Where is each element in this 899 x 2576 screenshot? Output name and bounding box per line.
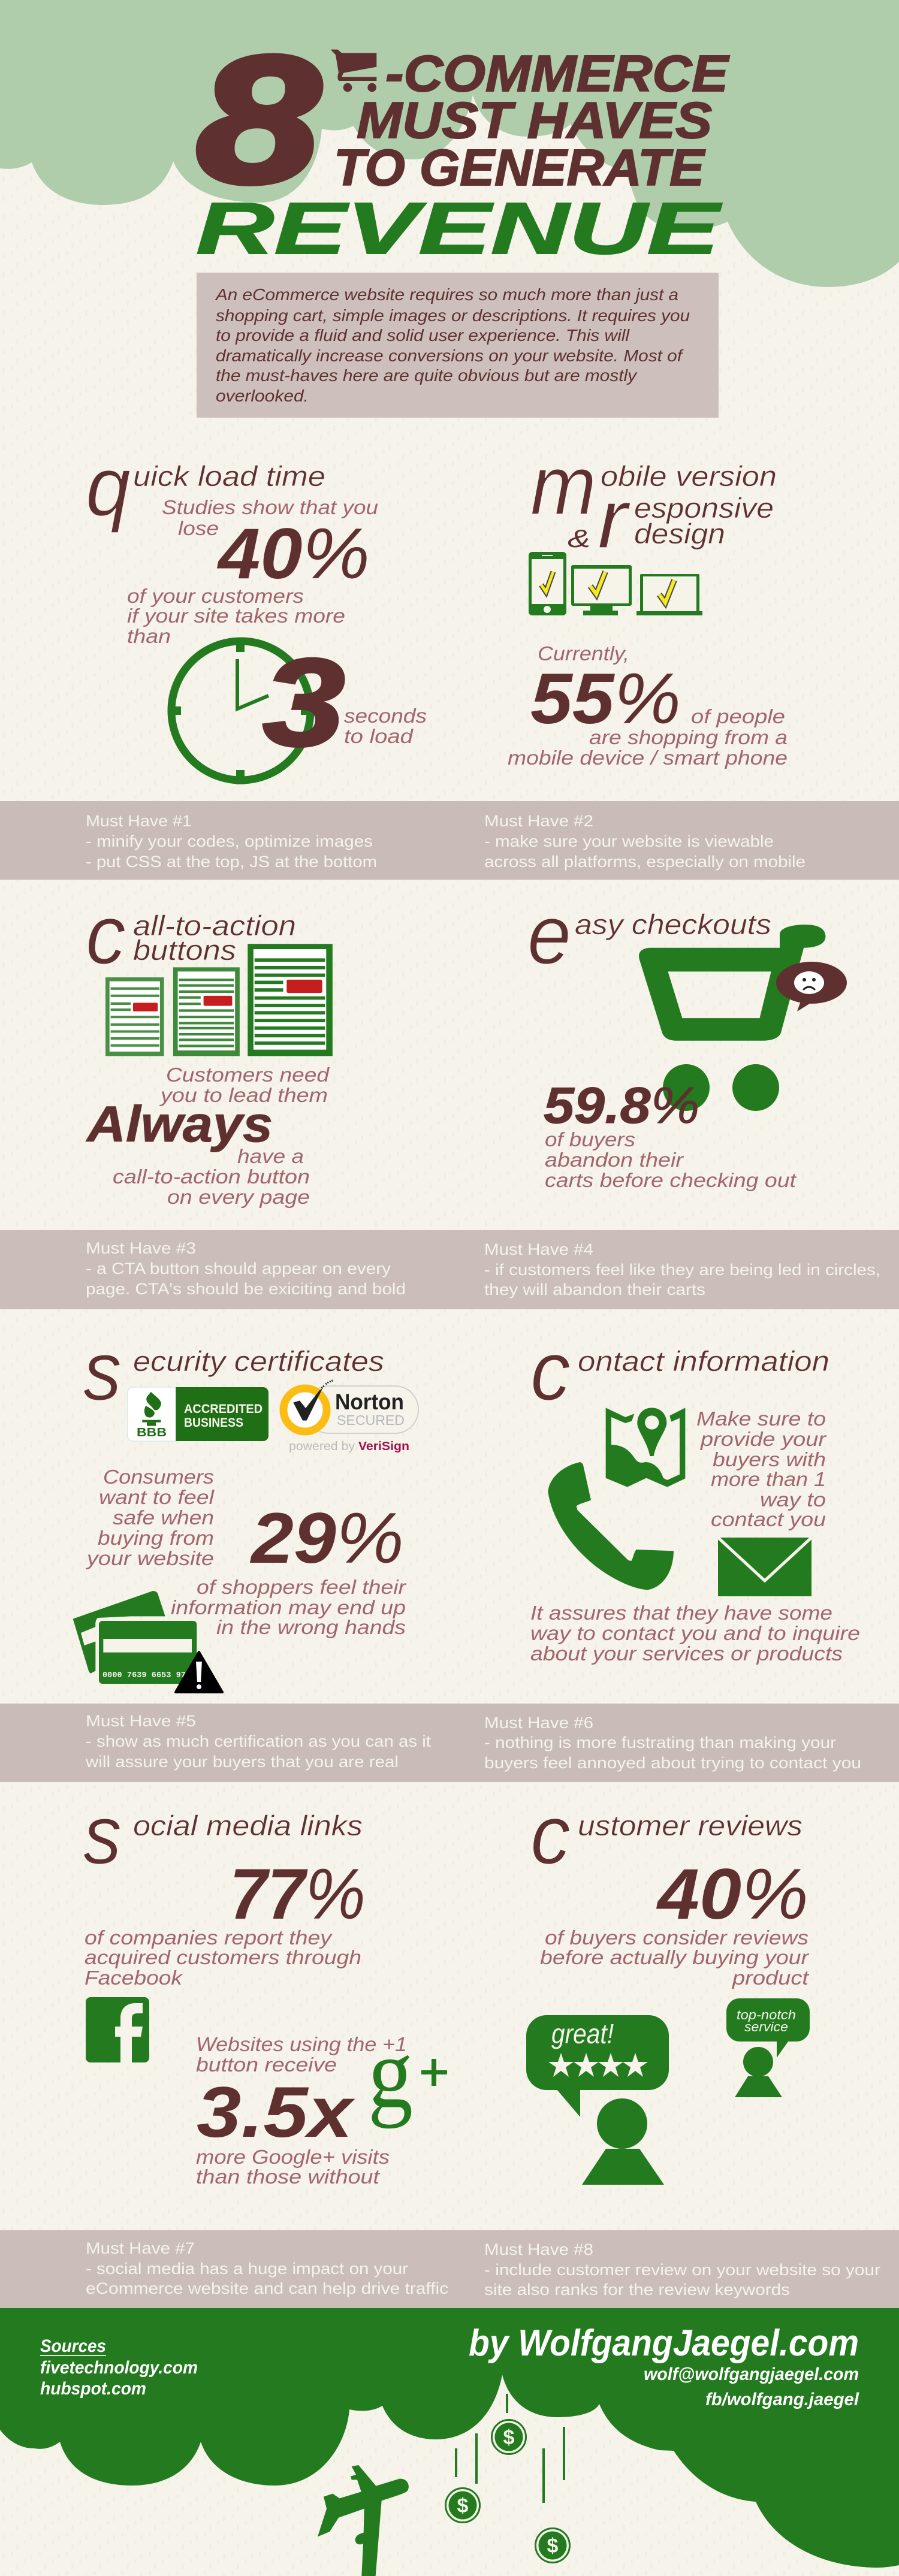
badge: Norton secured: SECURED [337, 1412, 405, 1428]
stat: 40%: 40% [217, 514, 370, 594]
text: consumers: buying from [98, 1527, 214, 1549]
footer author: by WolfgangJaegel.com [469, 2323, 859, 2364]
text: it assures: way to contact you and to inquire [530, 1622, 860, 1644]
text: make sure: provide your [700, 1428, 827, 1450]
text: studies show: lose [178, 517, 219, 539]
must have 8: Must Have #8 [484, 2240, 593, 2258]
heading: call-to-action buttons: c [86, 887, 126, 982]
heading: easy checkouts: asy checkouts [575, 908, 771, 940]
must have 4: Must Have #4 [484, 1240, 593, 1258]
heading: security certificates [83, 1324, 384, 1418]
heading: contact information: ontact information [578, 1345, 829, 1377]
title line 3: TO GENERATE [334, 140, 705, 197]
must have 4: they will abandon their carts [484, 1281, 705, 1298]
must have 1 [86, 812, 377, 871]
icon: great review bubble [526, 2015, 669, 2117]
intro text: dramatically increase conversions on your website. Most of [216, 346, 684, 365]
icon: google plus [368, 2018, 447, 2129]
text: make sure: more than 1 [711, 1468, 826, 1490]
text: consumers [86, 1466, 215, 1569]
title numeral 8: 8 [197, 19, 321, 220]
text: of shoppers: of shoppers feel their [197, 1576, 407, 1598]
badge: Norton secured: Norton [335, 1390, 404, 1414]
heading: social media links [83, 1787, 363, 1882]
text: make sure: contact you [711, 1508, 826, 1530]
stat: 29%: 29% [250, 1498, 404, 1578]
text: of buyers consider: product [732, 1967, 810, 1989]
must have 8 [484, 2240, 880, 2299]
text: consumers: want to feel [99, 1486, 215, 1508]
stat: 59.8%: 59.8% [544, 1077, 699, 1134]
text: of shoppers: information may end up [171, 1596, 406, 1618]
heading: customer reviews: c [530, 1787, 571, 1882]
heading: mobile version and responsive design: r [598, 472, 631, 566]
heading: mobile version and responsive design: design [634, 518, 725, 549]
intro text [215, 285, 690, 405]
icon: medium page [173, 967, 240, 1056]
icon: top-notch bubble: top-notch [737, 2007, 796, 2022]
must have 1: Must Have #1 [86, 812, 192, 830]
heading: contact information: c [530, 1324, 571, 1418]
text: it assures: about your services or products [530, 1642, 843, 1665]
icon: dollar coin 1: $ [503, 2426, 515, 2449]
badge: BBB accredited business: BUSINESS [184, 1416, 243, 1430]
heading: mobile version and responsive design: & [568, 524, 590, 552]
icon: shopping cart [331, 50, 376, 92]
icon: clock [168, 638, 314, 784]
must have 5: Must Have #5 [86, 1712, 196, 1730]
footer author: wolf@wolfgangjaegel.com [644, 2364, 859, 2384]
intro text: the must-haves here are quite obvious but are mostly [216, 366, 638, 385]
intro panel [197, 273, 719, 418]
footer sources: fivetechnology.com [40, 2358, 198, 2378]
footer author: fb/wolfgang.jaegel [705, 2390, 859, 2409]
text: have a button: on every page [167, 1186, 310, 1208]
text: of companies: Facebook [85, 1967, 183, 1989]
heading: call-to-action buttons [86, 887, 296, 982]
stat: 3.5x: 3.5x [197, 2072, 355, 2152]
heading: social media links: s [83, 1787, 122, 1882]
text: studies show [162, 496, 378, 539]
must have 3: page. CTA's should be exiciting and bold [86, 1280, 406, 1298]
icon: dollar coin 3 [536, 2529, 569, 2562]
icon: top-notch bubble [726, 1998, 810, 2058]
must have 5: will assure your buyers that you are real [85, 1753, 399, 1771]
must have 2: - make sure your website is viewable [484, 832, 774, 850]
text: seconds to load: to load [344, 725, 414, 747]
text: more google visits [196, 2146, 390, 2188]
text: of people shopping: are shopping from a [589, 726, 788, 748]
heading: mobile version and responsive design: obile version [601, 460, 777, 492]
icon: dollar coin 2 [446, 2488, 479, 2523]
must have 4: - if customers feel like they are being led in circles, [484, 1261, 880, 1279]
heading: easy checkouts: e [527, 887, 571, 982]
must have 3 [86, 1239, 406, 1298]
badge: BBB accredited business: ACCREDITED [184, 1402, 263, 1416]
must have 5: - show as much certification as you can as it [86, 1732, 432, 1750]
heading: quick load time [86, 439, 325, 533]
must have 6: - nothing is more fustrating than making your [484, 1734, 836, 1751]
heading: mobile version and responsive design [530, 438, 777, 566]
icon: dollar coin 1 [491, 2420, 526, 2454]
text: it assures [530, 1602, 860, 1665]
icon: credit cards with warning [73, 1591, 222, 1692]
text: more google visits: than those without [196, 2166, 381, 2188]
heading: security certificates: ecurity certificates [133, 1345, 384, 1377]
must have 6: buyers feel annoyed about trying to contact you [484, 1754, 861, 1772]
band: must have 1 and 2 [0, 801, 899, 880]
icon: envelope [718, 1538, 811, 1596]
text: studies show: Studies show that you [162, 496, 378, 518]
falling coin streaks [456, 2394, 564, 2503]
icon: large page [248, 944, 333, 1056]
icon: credit cards with warning: 0000 7639 6653 97 [102, 1671, 186, 1680]
top cloud [0, 0, 899, 287]
text: of buyers abandon [545, 1128, 797, 1191]
band: must have 3 and 4 [0, 1230, 899, 1309]
icon: phone device [529, 552, 566, 615]
band: must have 7 and 8 [0, 2230, 899, 2308]
heading: quick load time: q [86, 439, 131, 533]
icon: facebook [86, 1997, 149, 2062]
must have 1: - minify your codes, optimize images [86, 832, 373, 850]
text: of buyers consider: of buyers consider reviews [545, 1926, 809, 1949]
heading: customer reviews [530, 1787, 803, 1882]
panel: mobile version [508, 438, 788, 769]
icon: dollar coin 3: $ [547, 2535, 559, 2557]
must have 8: - include customer review on your website so your [484, 2261, 880, 2279]
text: of buyers abandon: abandon their [545, 1149, 684, 1171]
icon: person large [582, 2098, 664, 2185]
intro text: to provide a fluid and solid user experience. This will [216, 326, 630, 345]
heading: easy checkouts [527, 887, 771, 982]
text: make sure: way to [760, 1488, 826, 1511]
text: of shoppers: in the wrong hands [216, 1616, 406, 1638]
heading: contact information [530, 1324, 829, 1418]
text: of your customers [127, 585, 345, 647]
text: of companies: of companies report they [85, 1926, 333, 1949]
heading: social media links: ocial media links [133, 1810, 363, 1841]
heading: call-to-action buttons: buttons [133, 934, 236, 966]
panel: security certificates [73, 1324, 418, 1692]
text: consumers: your website [86, 1547, 214, 1569]
must have 3: - a CTA button should appear on every [86, 1260, 391, 1278]
heading: quick load time: uick load time [133, 460, 325, 492]
text: have a button: call-to-action button [113, 1165, 310, 1188]
footer sources: Sources [40, 2336, 106, 2356]
must have 4 [484, 1240, 880, 1298]
text: make sure: buyers with [713, 1448, 826, 1470]
text: have a button: have a [237, 1145, 304, 1167]
must have 7: eCommerce website and can help drive traffic [86, 2279, 448, 2297]
icon: telephone handset [548, 1462, 674, 1590]
text: of companies: acquired customers through [85, 1946, 361, 1968]
text: of buyers consider [540, 1926, 810, 1989]
text: customers need: you to lead them [159, 1084, 328, 1106]
text: websites using: button receive [196, 2053, 337, 2076]
must have 2: Must Have #2 [484, 812, 593, 830]
text: websites using [196, 2033, 407, 2076]
band: must have 5 and 6 [0, 1704, 899, 1782]
stat: 40% reviews: 40% [656, 1854, 809, 1934]
text: of buyers abandon: of buyers [545, 1128, 635, 1150]
text: make sure: Make sure to [696, 1408, 826, 1430]
heading: mobile version and responsive design: esponsive [634, 492, 774, 524]
badge: BBB accredited business [128, 1387, 269, 1441]
title word revenue: REVENUE [196, 188, 722, 269]
footer sources: hubspot.com [40, 2379, 146, 2399]
text: websites using: Websites using the +1 [196, 2033, 407, 2055]
text: consumers: safe when [113, 1506, 214, 1529]
heading: customer reviews: ustomer reviews [578, 1810, 803, 1841]
must have 6 [484, 1714, 861, 1772]
intro text: shopping cart, simple images or descriptions. It requires you [216, 306, 690, 325]
text: make sure [696, 1408, 827, 1530]
icon: map pin [606, 1408, 685, 1487]
icon: devices [529, 552, 702, 615]
stat: always: Always [86, 1096, 273, 1152]
icon: airplane [318, 2465, 409, 2576]
text: of your customers: if your site takes more [127, 605, 345, 627]
icon: laptop device [636, 574, 702, 615]
icon: small page [105, 977, 164, 1056]
panel: social media links [83, 1787, 447, 2188]
stat: 55%: 55% [530, 659, 681, 739]
footer cloud [0, 2308, 899, 2568]
text: of shoppers [171, 1576, 407, 1638]
badge: Norton secured: powered by VeriSign [289, 1440, 409, 1453]
footer author [469, 2323, 859, 2409]
must have 7: Must Have #7 [86, 2239, 195, 2257]
heading: security certificates: s [83, 1324, 122, 1418]
text: of people shopping [508, 705, 788, 769]
text: of buyers consider: before actually buying your [540, 1946, 810, 1968]
text: seconds to load: seconds [344, 705, 427, 727]
text: customers need: Customers need [166, 1064, 330, 1086]
text: of people shopping: mobile device / smart phone [508, 747, 788, 769]
must have 3: Must Have #3 [86, 1239, 196, 1257]
intro text: overlooked. [216, 386, 309, 405]
icon: dollar coin 2: $ [457, 2495, 469, 2517]
text: of companies [85, 1926, 361, 1989]
must have 8: site also ranks for the review keywords [484, 2281, 790, 2299]
intro text: An eCommerce website requires so much more than just a [215, 285, 678, 304]
text: of people shopping: of people [691, 705, 785, 727]
footer sources [40, 2336, 198, 2399]
must have 7 [86, 2239, 448, 2297]
badge: BBB accredited business: BBB [137, 1426, 167, 1439]
text: customers need [159, 1064, 330, 1106]
text: have a button [113, 1145, 310, 1208]
text: of your customers: of your customers [127, 585, 304, 607]
must have 2: across all platforms, especially on mobile [484, 853, 806, 871]
icon: page documents [105, 944, 333, 1056]
badge: Norton secured [283, 1380, 418, 1453]
text: consumers: Consumers [103, 1466, 214, 1488]
icon: person small [735, 2047, 782, 2097]
must have 2 [484, 812, 806, 871]
panel: quick load time [86, 439, 427, 784]
text: of your customers: than [127, 625, 171, 647]
panel: easy checkouts [527, 887, 847, 1191]
must have 7: - social media has a huge impact on your [86, 2260, 408, 2278]
panel: contact information [530, 1324, 860, 1665]
panel: call-to-action buttons [86, 887, 333, 1208]
icon: google plus: g [368, 2018, 413, 2129]
must have 1: - put CSS at the top, JS at the bottom [86, 853, 377, 871]
title [196, 19, 729, 269]
text: it assures: It assures that they have some [530, 1602, 832, 1624]
icon: sad face bubble [776, 962, 847, 1011]
icon: monitor device [571, 565, 632, 615]
heading: mobile version and responsive design: m [530, 438, 596, 532]
title line 2: MUST HAVES [357, 92, 712, 149]
must have 5 [85, 1712, 432, 1771]
text: of buyers abandon: carts before checking out [545, 1169, 797, 1191]
text: more google visits: more Google+ visits [196, 2146, 390, 2168]
stat: 3: 3 [263, 633, 345, 772]
icon: large cart [639, 925, 826, 1111]
heading: call-to-action buttons: all-to-action [133, 910, 296, 941]
icon: great review bubble: great! [551, 2018, 614, 2049]
icon: top-notch bubble: service [744, 2019, 788, 2034]
text: currently: Currently, [538, 642, 629, 665]
text: seconds to load [344, 705, 427, 747]
must have 6: Must Have #6 [484, 1714, 593, 1732]
panel: customer reviews [526, 1787, 810, 2185]
stat: 77%: 77% [230, 1854, 366, 1934]
title line 1: -COMMERCE [385, 46, 729, 102]
